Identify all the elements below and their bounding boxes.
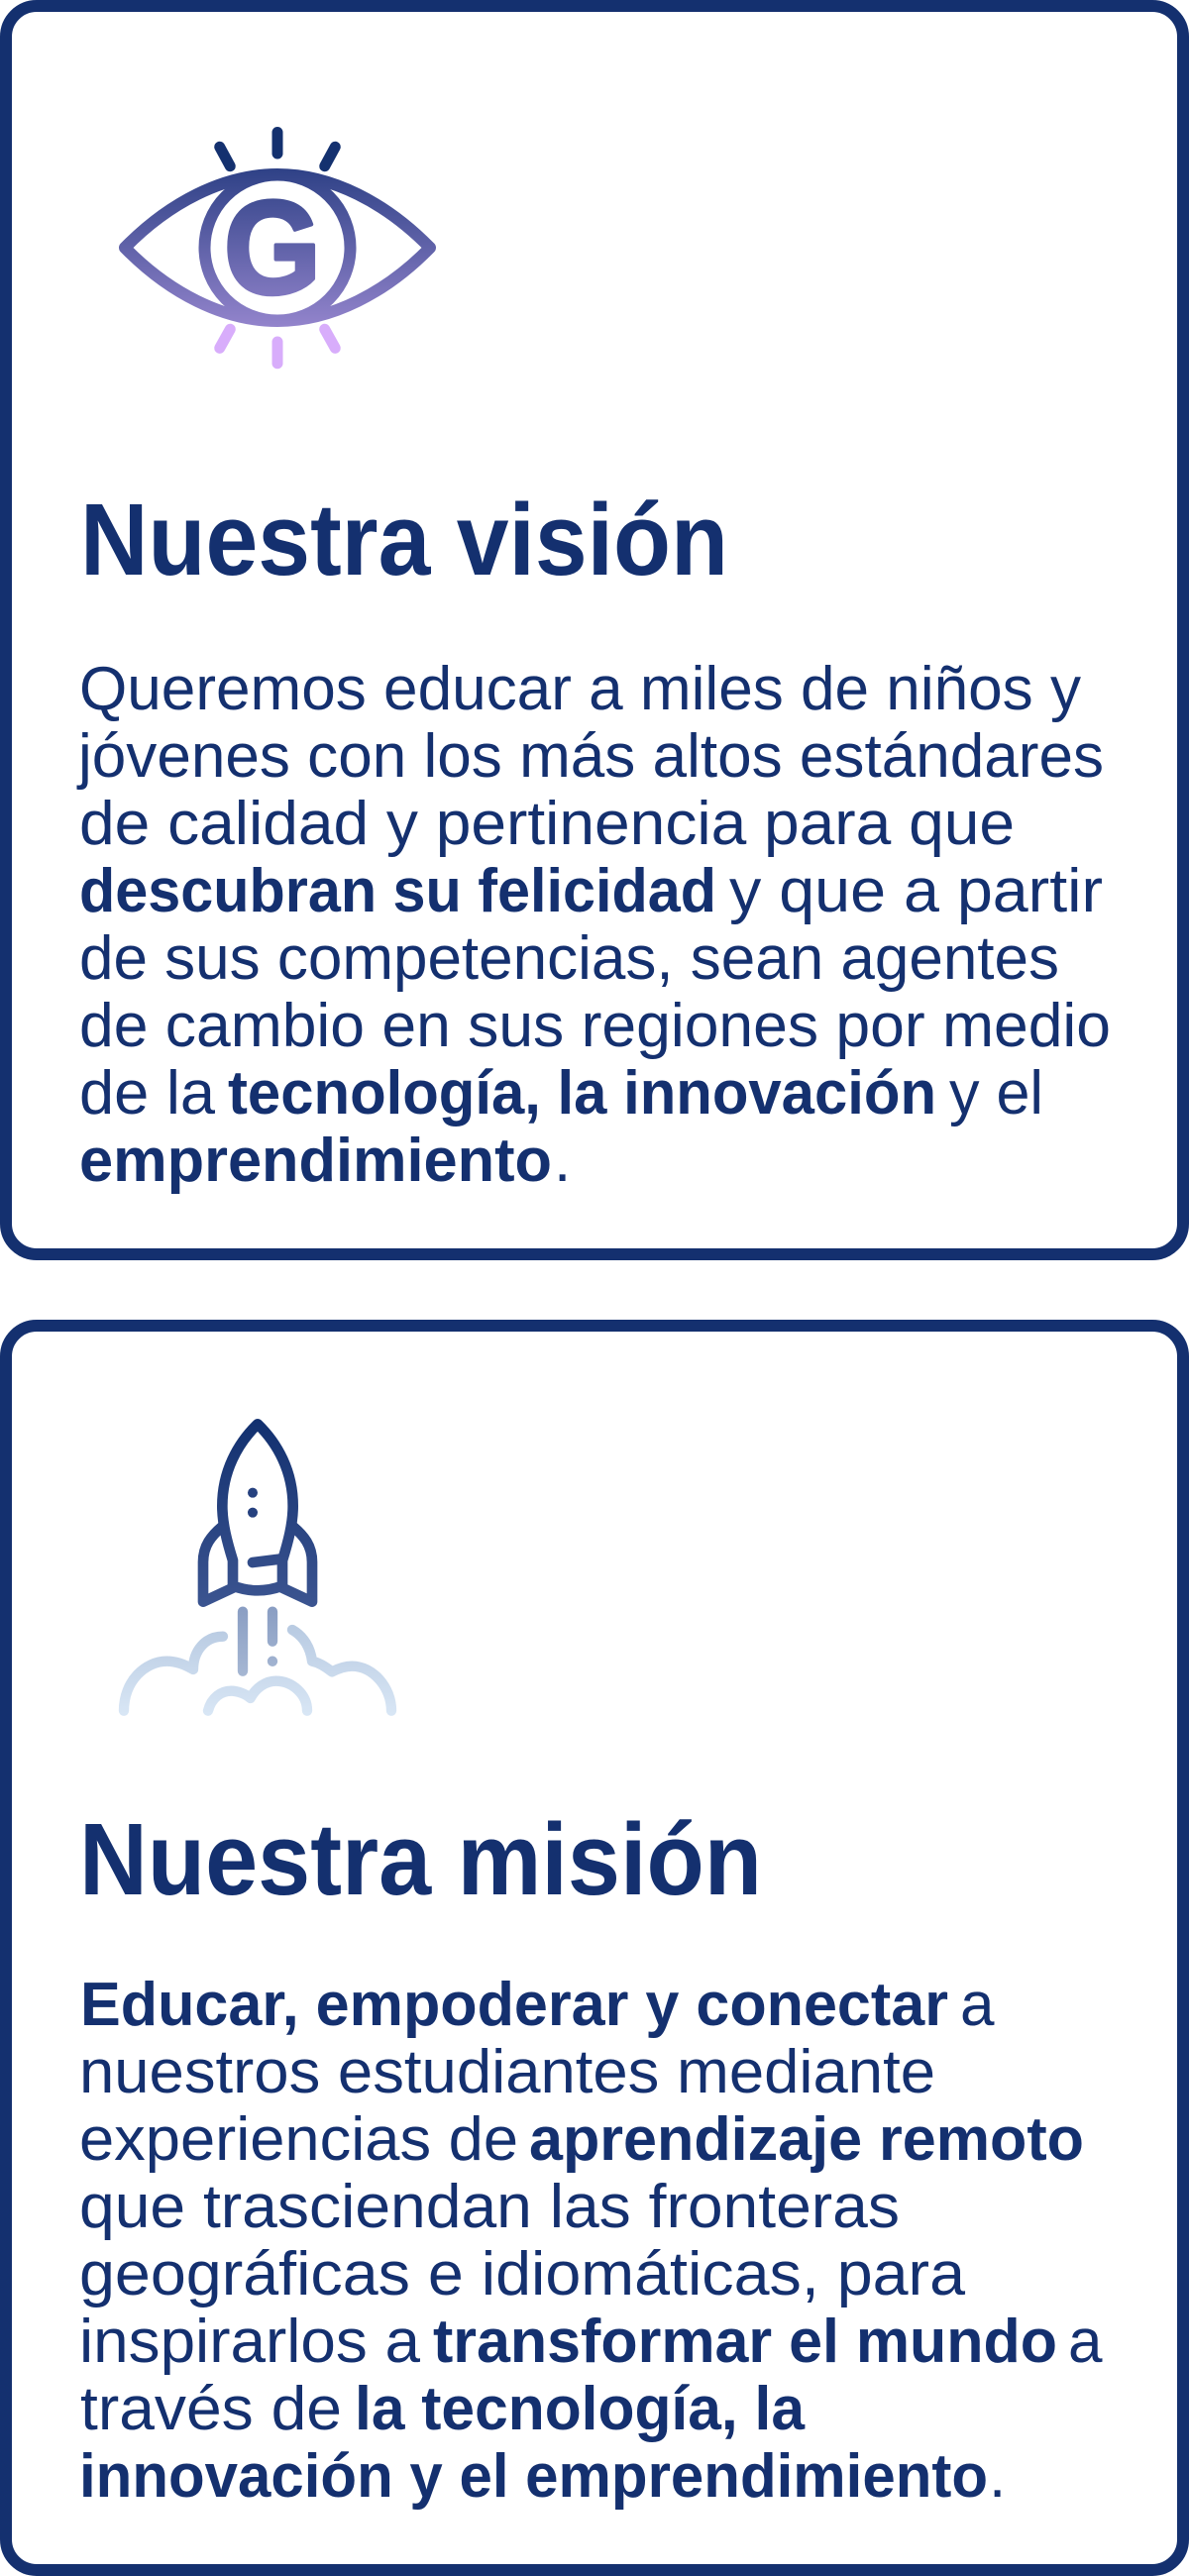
icon: G letter in iris: G [224, 174, 321, 322]
icon: smoke clouds [124, 1630, 391, 1711]
icon: eye with G [125, 133, 430, 364]
text block: misión paragraph: a [960, 1971, 995, 2039]
icon: upper rays [220, 133, 335, 166]
text block: visión paragraph: . [554, 1127, 571, 1195]
text block: misión paragraph: nuestros estudiantes mediante [79, 2038, 935, 2106]
text block: misión paragraph: Educar, empoderar y conectar [80, 1971, 948, 2039]
text block: misión paragraph: inspirarlos a [79, 2308, 421, 2376]
text block: visión paragraph: y el [949, 1059, 1043, 1127]
panel frame: misión [6, 1326, 1183, 2570]
icon: eye outline and iris [125, 174, 430, 321]
text block: visión paragraph: de sus competencias, sean agentes [79, 924, 1059, 993]
text block: visión paragraph: jóvenes con los más altos estándares [76, 722, 1104, 791]
panel frame: visión [6, 6, 1183, 1254]
text block: visión paragraph: de la [79, 1059, 216, 1127]
text block: misión paragraph: . [989, 2442, 1006, 2511]
panel: nuestra misión [6, 1326, 1183, 2570]
text block: visión paragraph: Queremos educar a miles de niños y [79, 655, 1081, 723]
text block: visión paragraph [76, 655, 1111, 1195]
text block: misión paragraph [79, 1971, 1103, 2511]
text block: misión paragraph: transformar el mundo [433, 2308, 1057, 2376]
icon: rocket body [203, 1424, 312, 1602]
text block: visión paragraph: descubran su felicidad [79, 857, 716, 925]
icon: rocket windows [248, 1488, 258, 1518]
text block: misión paragraph: geográficas e idiomáticas, para [79, 2240, 966, 2308]
text block: visión paragraph: de calidad y pertinencia para que [79, 790, 1015, 858]
text block: visión paragraph: emprendimiento [79, 1127, 552, 1195]
text block: misión paragraph: aprendizaje remoto [529, 2105, 1084, 2174]
heading: nuestra misión: Nuestra misión [79, 1802, 762, 1916]
text block: misión paragraph: la tecnología, la [355, 2375, 806, 2443]
panel: nuestra visión [6, 6, 1183, 1254]
text block: visión paragraph: de cambio en sus regiones por medio [79, 992, 1111, 1060]
text block: misión paragraph: innovación y el emprendimiento [79, 2442, 988, 2511]
icon: lower rays [220, 329, 335, 364]
text block: misión paragraph: que trasciendan las fronteras [79, 2173, 900, 2241]
icon: rocket launching [124, 1424, 391, 1711]
text block: misión paragraph: experiencias de [79, 2105, 518, 2174]
text block: misión paragraph: a [1068, 2308, 1103, 2376]
text block: visión paragraph: y que a partir [729, 857, 1103, 925]
icon: exhaust lines [243, 1612, 272, 1671]
text block: visión paragraph: tecnología, la innovación [228, 1059, 936, 1127]
text block: misión paragraph: través de [80, 2375, 342, 2443]
heading: nuestra visión: Nuestra visión [80, 483, 728, 596]
